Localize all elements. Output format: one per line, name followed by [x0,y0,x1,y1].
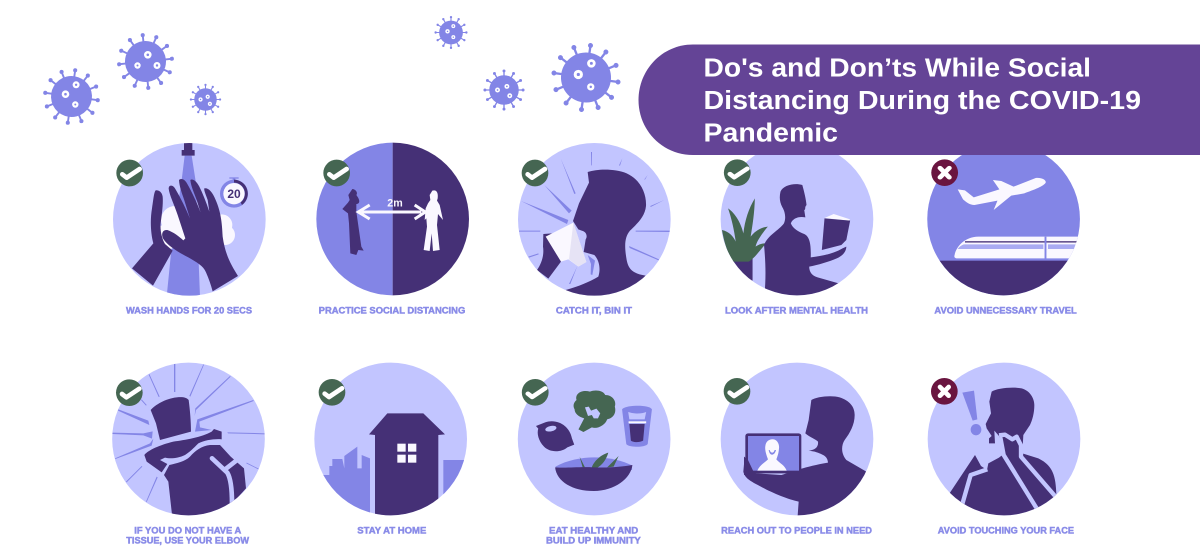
label: eat healthy: BUILD UP IMMUNITY [546,535,641,545]
check badge [522,160,548,186]
title banner [638,44,1200,155]
coat seams [212,458,238,503]
person right [424,190,443,251]
label: eat healthy: EAT HEALTHY AND [549,525,638,535]
label: wash hands: WASH HANDS FOR 20 SECS [126,305,252,315]
icon: social distancing [316,143,469,295]
rays [112,363,266,502]
label: social distancing: PRACTICE SOCIAL DISTANCING [319,305,465,315]
tap [182,143,195,156]
soap foam [160,206,235,249]
head [566,170,646,300]
hand [537,233,561,279]
label: elbow [126,525,250,545]
bowl [555,465,632,491]
title text [704,54,1141,148]
virus 3 [190,84,221,115]
back hand [132,190,173,286]
plant pot [733,258,753,281]
glass [622,406,652,447]
sneeze rays [519,152,670,284]
check badge [522,379,549,406]
virus 6 [548,39,624,116]
icon: wash hands [113,140,266,297]
arrow 2m: 2m [387,198,403,210]
label: elbow: TISSUE, USE YOUR ELBOW [126,535,250,545]
title text: Pandemic [704,120,838,148]
icon: elbow sneeze [112,363,266,527]
caller on screen [757,439,787,471]
book [822,214,850,250]
ground [940,260,1068,296]
title text: Distancing During the COVID-19 [704,87,1141,115]
train [954,237,1078,259]
label: elbow: IF YOU DO NOT HAVE A [134,525,242,535]
label: reach out: REACH OUT TO PEOPLE IN NEED [721,525,872,535]
head [151,397,191,440]
label: avoid touching: AVOID TOUCHING YOUR FACE [938,525,1074,535]
check badge [116,379,143,406]
virus 1 [40,65,103,128]
check badge [116,160,143,186]
stopwatch [220,177,248,208]
bowl rim [555,457,632,470]
plane [958,178,1046,210]
cross badge [931,378,958,405]
broccoli [574,391,615,432]
icon: eat healthy [518,363,670,515]
label: eat healthy [546,525,641,545]
hand on tablet [744,457,754,475]
person [743,396,866,520]
person reading [764,184,846,300]
right half [393,143,469,295]
exclamation mark [962,391,981,435]
virus 5 [484,70,524,110]
check badge [724,378,750,405]
virus 4 [435,16,467,49]
check badge [323,160,350,186]
check badge [319,379,345,406]
icon: reach out [721,363,873,520]
window [397,444,416,463]
leaves [580,453,619,468]
plant [722,198,768,262]
icon: avoid travel [927,155,1080,296]
water stream [167,156,200,297]
label: stay at home: STAY AT HOME [357,525,426,535]
person left [342,189,364,255]
virus 2 [115,31,176,92]
lemon [536,421,574,451]
hand and collar outlines [962,435,1055,508]
left half [316,143,393,295]
check badge [724,159,751,186]
tablet [745,433,801,473]
city right [443,460,464,494]
front hand [162,179,238,291]
label: avoid travel: AVOID UNNECESSARY TRAVEL [934,305,1077,315]
raised arm [144,429,222,472]
broccoli stem highlight [585,407,600,418]
virus decorations [40,16,624,128]
icon: catch it bin it [518,143,671,300]
city left [323,446,370,512]
icon: mental health [720,155,874,296]
label: mental health: LOOK AFTER MENTAL HEALTH [725,305,868,315]
icon: avoid touching face [928,363,1080,527]
person silhouette [950,388,1058,527]
arrow 2m [358,198,425,219]
tissue [546,223,586,267]
label: catch it: CATCH IT, BIN IT [556,305,633,315]
stopwatch: 20 [227,187,241,201]
cross badge [931,159,958,186]
icon: stay at home [314,362,467,516]
title text: Do's and Don’ts While Social [704,54,1091,82]
torso and back arm [164,445,246,516]
house [369,413,445,520]
